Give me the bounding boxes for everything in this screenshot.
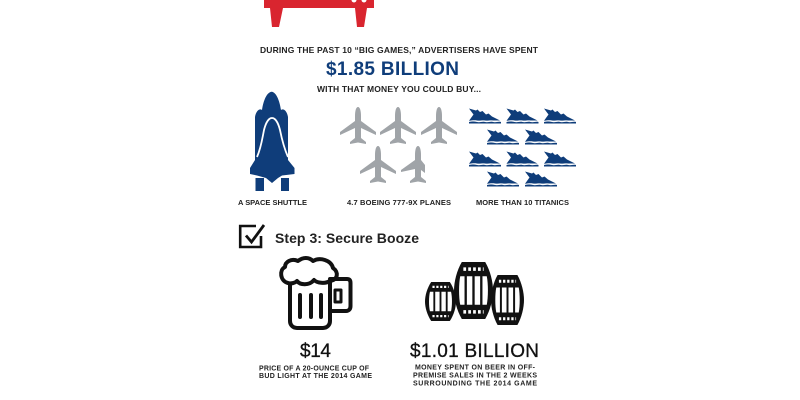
- icon: checkbox: [240, 225, 264, 247]
- icon: five planes: [340, 107, 457, 183]
- heading: step 3: Step 3: Secure Booze: [275, 230, 419, 246]
- lead-in text: WITH THAT MONEY YOU COULD BUY...: [317, 84, 481, 94]
- caption: bud light price: BUD LIGHT AT THE 2014 GAME: [259, 373, 372, 380]
- icon: beer mug: [281, 258, 350, 328]
- caption: beer sales: SURROUNDING THE 2014 GAME: [413, 380, 537, 388]
- figure: $14: $14: [300, 341, 331, 362]
- caption: bud light price: [259, 366, 372, 380]
- label: planes: 4.7 BOEING 777-9X PLANES: [347, 198, 451, 207]
- intro text: DURING THE PAST 10 “BIG GAMES,” ADVERTISERS HAVE SPENT: [260, 45, 539, 55]
- label: space shuttle: A SPACE SHUTTLE: [238, 198, 307, 207]
- icon: ten sinking ships: [469, 108, 576, 186]
- icon: three barrels: [425, 262, 524, 325]
- caption: bud light price: PRICE OF A 20-OUNCE CUP OF: [259, 366, 370, 372]
- icon: space shuttle: [250, 92, 294, 191]
- headline figure: $1.85 BILLION: [326, 59, 459, 80]
- figure: $1.01 billion: $1.01 BILLION: [410, 341, 539, 362]
- label: ships: MORE THAN 10 TITANICS: [476, 198, 569, 207]
- caption: beer sales: [413, 364, 537, 388]
- icon: red table legs: [264, 0, 374, 27]
- caption: beer sales: PREMISE SALES IN THE 2 WEEKS: [413, 372, 537, 380]
- caption: beer sales: MONEY SPENT ON BEER IN OFF-: [415, 364, 536, 372]
